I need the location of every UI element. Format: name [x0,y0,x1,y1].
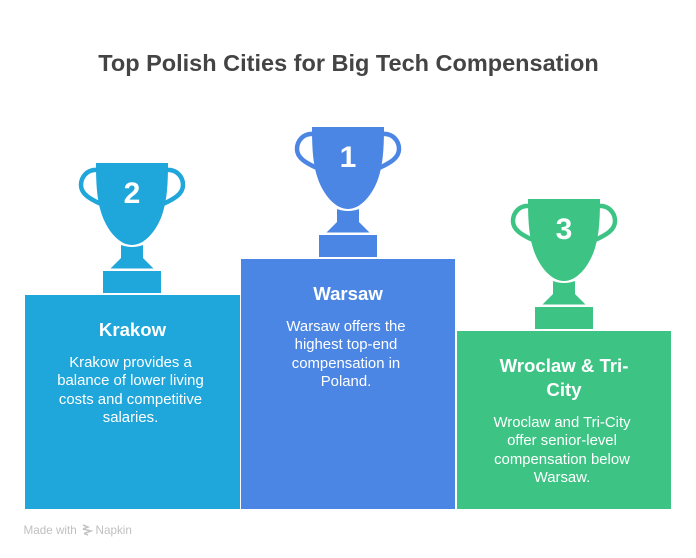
text: Warsaw description: highest top-end [295,337,397,353]
icon: trophy 3: 3 [556,213,572,246]
footer: made with: Made with [24,524,77,536]
icon: trophy 2 [81,163,183,293]
text: Wroclaw & Tri-City description: compensation below [494,452,630,468]
icon: trophy 3 [513,199,615,329]
heading: Warsaw: Warsaw [313,283,383,304]
text: Warsaw description [286,319,406,390]
icon: Napkin logo [83,525,91,535]
panel: Wroclaw & Tri-City [457,331,671,509]
text: Krakow description: balance of lower living [57,373,204,389]
text: Warsaw description: Poland. [321,374,371,390]
icon: trophy 2: 2 [124,177,140,210]
panel: Warsaw [241,259,455,509]
heading: Wroclaw & Tri-City [500,355,628,400]
text: Krakow description: Krakow provides a [69,355,192,371]
text: Warsaw description: Warsaw offers the [286,319,406,335]
text: Wroclaw & Tri-City description [493,415,631,486]
heading: Krakow: Krakow [99,319,166,340]
text: Wroclaw & Tri-City description: Wroclaw and Tri-City [493,415,631,431]
heading: Wroclaw & Tri-City: City [546,379,582,400]
text: Wroclaw & Tri-City description: offer senior-level [507,433,617,449]
text: Warsaw description: compensation in [292,356,400,372]
text: Krakow description: costs and competitive [59,392,202,408]
footer: Napkin: Napkin [96,524,132,536]
panel: Krakow [25,295,240,509]
text: Wroclaw & Tri-City description: Warsaw. [534,470,590,486]
icon: trophy 1 [297,127,399,257]
heading: Wroclaw & Tri-City: Wroclaw & Tri- [500,355,628,376]
text: Krakow description [57,355,204,426]
title: Top Polish Cities for Big Tech Compensation [98,50,599,76]
icon: trophy 1: 1 [340,141,356,174]
text: Krakow description: salaries. [103,410,158,426]
